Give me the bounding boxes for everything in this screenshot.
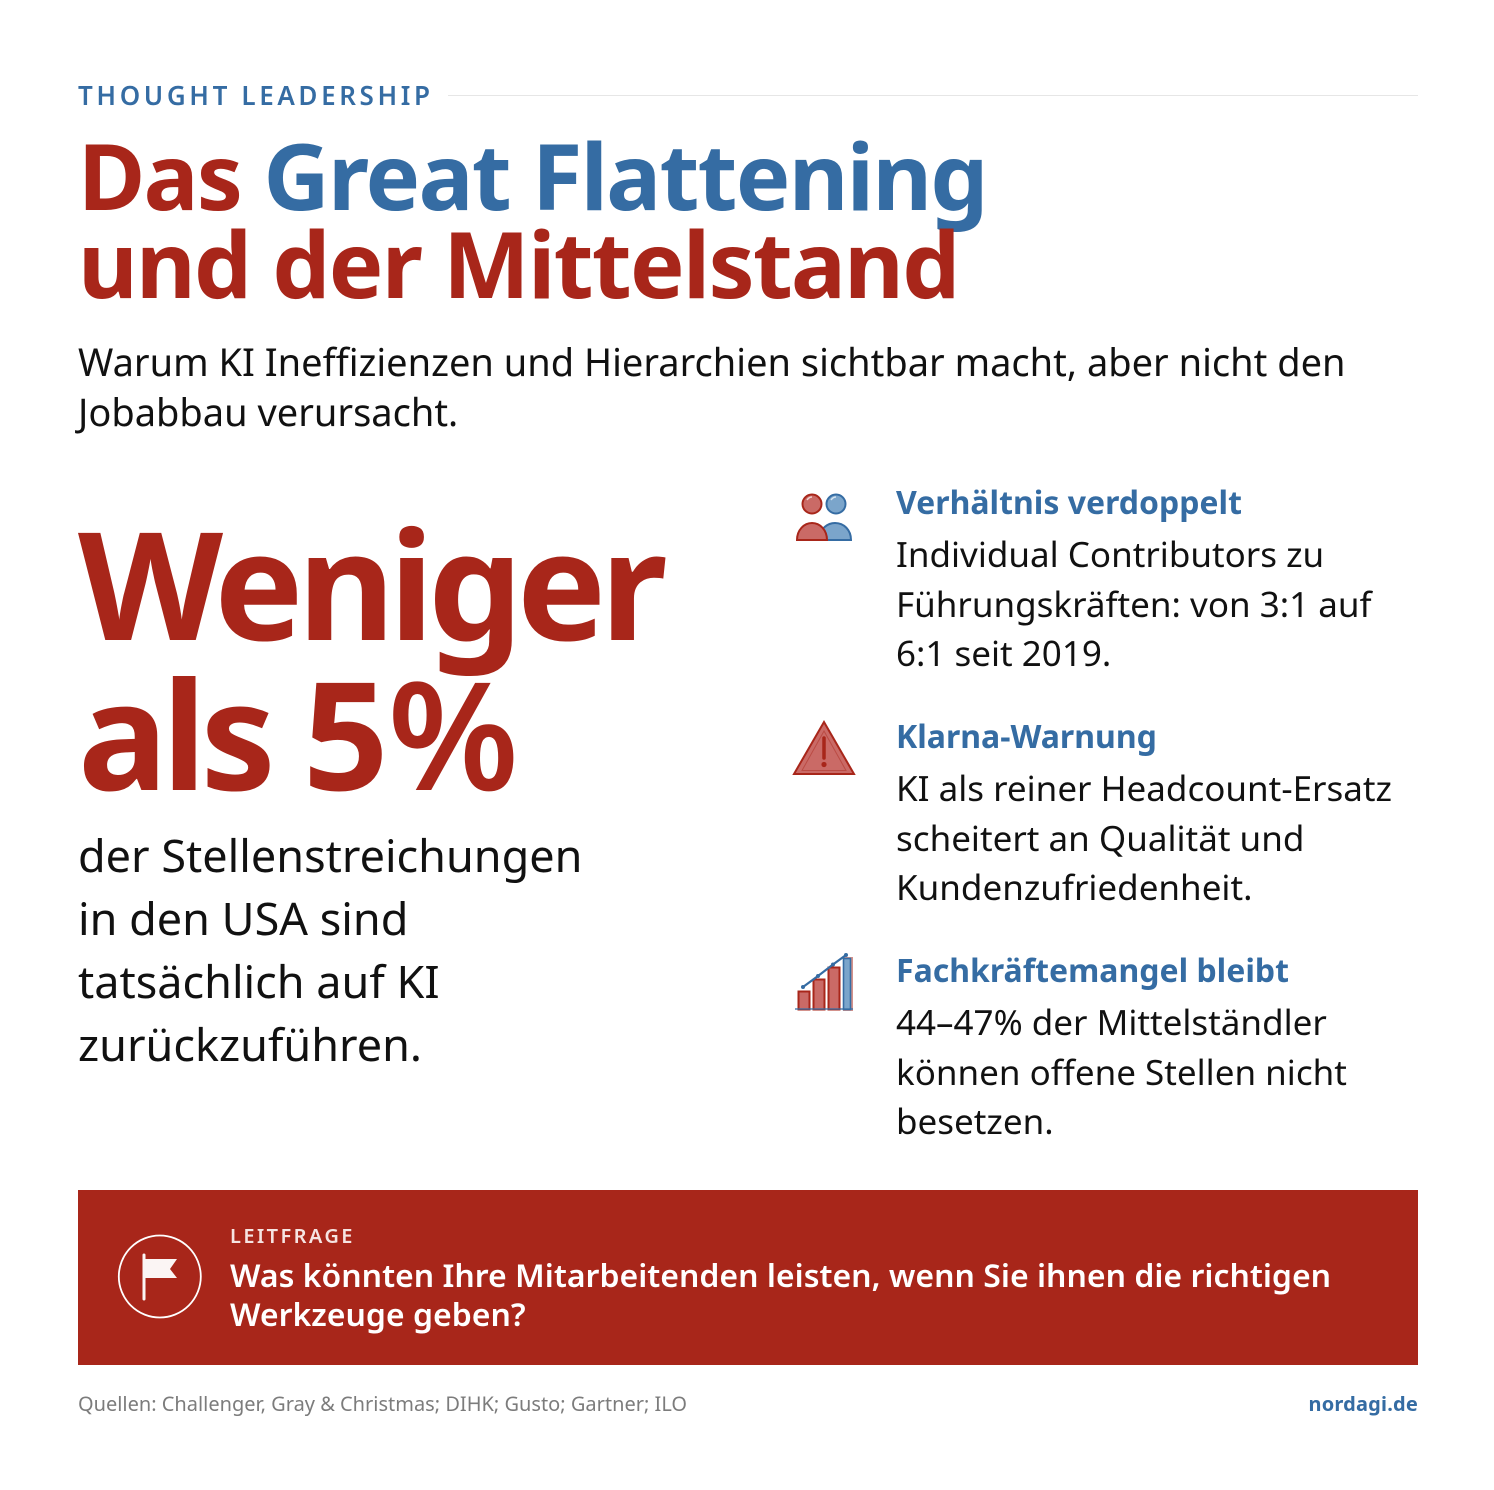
title: und der Mittelstand xyxy=(78,200,958,325)
callout question xyxy=(230,1254,1331,1336)
item 2: Klarna-Warnung: Kundenzufriedenheit. xyxy=(896,864,1252,911)
stat description xyxy=(78,825,582,1075)
icon: bar chart xyxy=(795,953,853,1011)
item 1: Verhältnis verdoppelt: Verhältnis verdoppelt xyxy=(896,481,1242,524)
item 1: Verhältnis verdoppelt: 6:1 seit 2019. xyxy=(896,630,1111,677)
subtitle: Jobabbau verursacht. xyxy=(78,386,458,438)
brand: nordagi.de xyxy=(1309,1390,1418,1417)
item 2: Klarna-Warnung: scheitert an Qualität und xyxy=(896,815,1304,862)
title xyxy=(78,112,987,325)
big stat: Weniger xyxy=(78,480,661,684)
title: Das Great Flattening xyxy=(78,112,987,237)
callout label: LEITFRAGE xyxy=(230,1222,355,1249)
big stat xyxy=(78,480,666,834)
callout: Leitfrage xyxy=(78,1190,1418,1365)
stat description: der Stellenstreichungen xyxy=(78,825,582,886)
sources: Quellen: Challenger, Gray & Christmas; DIHK; Gusto; Gartner; ILO xyxy=(78,1390,687,1417)
callout question: Werkzeuge geben? xyxy=(230,1293,526,1336)
big stat: als 5% xyxy=(78,630,513,834)
icon: warning triangle xyxy=(792,720,856,775)
item 3: Fachkräftemangel bleibt: Fachkräftemangel bleibt xyxy=(896,949,1289,992)
eyebrow label: THOUGHT LEADERSHIP xyxy=(78,77,434,113)
item 3: Fachkräftemangel bleibt: 44–47% der Mittelständler xyxy=(896,999,1327,1046)
item 2: Klarna-Warnung xyxy=(896,715,1392,911)
icon: flag xyxy=(118,1234,202,1318)
subtitle: Warum KI Ineffizienzen und Hierarchien sichtbar macht, aber nicht den xyxy=(78,336,1346,388)
item 2: Klarna-Warnung: Klarna-Warnung xyxy=(896,715,1157,758)
item 3: Fachkräftemangel bleibt xyxy=(896,949,1347,1145)
item 1: Verhältnis verdoppelt: Individual Contributors zu xyxy=(896,531,1324,578)
item 1: Verhältnis verdoppelt: Führungskräften: von 3:1 auf xyxy=(896,581,1372,628)
callout question: Was könnten Ihre Mitarbeitenden leisten, wenn Sie ihnen die richtigen xyxy=(230,1254,1331,1297)
icon: people xyxy=(796,494,852,541)
item 1: Verhältnis verdoppelt xyxy=(896,481,1373,677)
item 2: Klarna-Warnung: KI als reiner Headcount-Ersatz xyxy=(896,765,1392,812)
subtitle xyxy=(75,336,1346,438)
item 3: Fachkräftemangel bleibt: können offene Stellen nicht xyxy=(896,1049,1347,1096)
stat description: in den USA sind xyxy=(78,888,408,949)
item 3: Fachkräftemangel bleibt: besetzen. xyxy=(896,1098,1054,1145)
stat description: tatsächlich auf KI xyxy=(78,951,440,1012)
stat description: zurückzuführen. xyxy=(78,1014,422,1075)
